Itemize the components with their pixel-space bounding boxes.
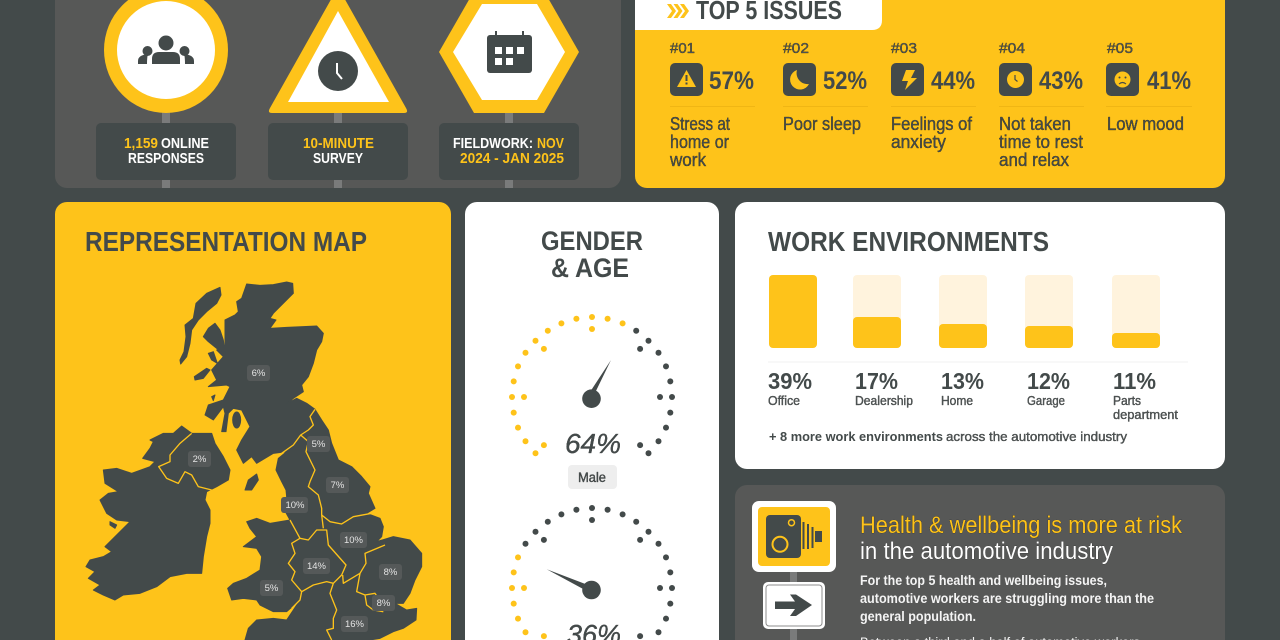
bar values and labels: 13% [941, 368, 984, 394]
map percentage labels: 2% [193, 454, 207, 465]
issue 5: Low mood [1107, 114, 1184, 134]
heading: health and wellbeing [860, 512, 1183, 565]
label: online responses [96, 123, 236, 180]
issue 4: 43% [1039, 67, 1083, 95]
issue 4: and relax [999, 150, 1069, 170]
issue 1: Stress at [670, 114, 730, 134]
footnote: across the automotive industry [946, 429, 1128, 444]
heading: work environments: WORK ENVIRONMENTS [768, 226, 1049, 257]
bar values and labels: Home [941, 393, 973, 408]
icon: hexagon sign with calendar [439, 0, 579, 113]
issue 1: work [669, 150, 707, 170]
issue 4: Not taken [999, 114, 1071, 134]
label: survey length: SURVEY [313, 150, 363, 167]
issue 2: 52% [823, 67, 867, 95]
icon: circular sign with people [104, 0, 228, 113]
gauge: female 36% [509, 505, 675, 640]
bar values and labels: Garage [1027, 393, 1065, 408]
issue 1: 57% [709, 67, 754, 95]
body text: For the top 5 health and wellbeing issues, [860, 573, 1107, 588]
issue 3: 44% [931, 67, 975, 95]
panel: survey facts [55, 0, 621, 188]
map percentage labels: 16% [345, 619, 365, 630]
map percentage labels: 8% [377, 598, 391, 609]
bar chart [768, 275, 1188, 362]
label: fieldwork dates: FIELDWORK: [453, 135, 533, 152]
map percentage labels: 14% [307, 561, 327, 572]
label: fieldwork dates: NOV [537, 135, 564, 152]
issue 5: 41% [1147, 67, 1191, 95]
bar values and labels: department [1113, 407, 1178, 422]
bar values and labels: 12% [1027, 368, 1070, 394]
issue 2 [783, 40, 868, 134]
bar values and labels: Parts [1113, 393, 1141, 408]
gauge: male 64%: 64% [565, 428, 621, 459]
icon: triangular sign with clock [269, 0, 407, 113]
issue 3 [891, 40, 976, 152]
heading: representation map: REPRESENTATION MAP [85, 226, 367, 257]
panel: health and wellbeing risk [735, 485, 1225, 640]
body text: automotive workers are struggling more than the [860, 591, 1154, 606]
heading: health and wellbeing: in the automotive industry [860, 538, 1113, 565]
label: online responses: RESPONSES [128, 150, 204, 167]
label: online responses: ONLINE [161, 135, 209, 152]
bar values and labels: 11% [1113, 368, 1156, 394]
map percentage labels: 8% [384, 567, 398, 578]
map percentage labels: 6% [252, 368, 266, 379]
bar values and labels: 39% [768, 368, 812, 394]
label: survey length: 10-MINUTE [303, 135, 374, 152]
issue 4: #04 [999, 40, 1025, 57]
map percentage labels: 7% [331, 480, 345, 491]
label: fieldwork dates [439, 123, 579, 180]
panel: gender and age [465, 202, 719, 640]
issue 4 [999, 40, 1084, 170]
map of UK and Ireland [86, 282, 422, 640]
label: fieldwork dates: 2024 - JAN 2025 [460, 150, 564, 167]
panel: representation map [55, 202, 451, 640]
map percentage labels: 5% [265, 583, 279, 594]
heading: gender and age: & AGE [551, 253, 629, 283]
bar values and labels: Dealership [855, 393, 913, 408]
issue 5 [1106, 40, 1192, 134]
issue 1: #01 [670, 40, 695, 57]
issue 1: home or [670, 132, 729, 152]
panel: top 5 issues [635, 0, 1225, 188]
label: survey length [268, 123, 408, 180]
heading: gender and age: GENDER [541, 226, 643, 256]
issue 2: #02 [783, 40, 809, 57]
issue 4: time to rest [999, 132, 1083, 152]
icon: speed camera sign [752, 501, 836, 572]
body text: general population. [860, 609, 976, 624]
heading: top 5 issues tab [635, 0, 882, 30]
bar values and labels [768, 368, 1178, 422]
map percentage labels: 5% [312, 439, 326, 450]
panel: work environments [735, 202, 1225, 469]
bar values and labels: Office [768, 393, 800, 408]
footnote [769, 429, 1128, 444]
heading: health and wellbeing: Health & wellbeing is more at risk [860, 512, 1183, 539]
issue 5: #05 [1107, 40, 1133, 57]
issue 2: Poor sleep [783, 114, 861, 134]
map percentage labels: 10% [344, 535, 364, 546]
map percentage labels [188, 365, 402, 632]
issue 3: #03 [891, 40, 917, 57]
issue 1 [669, 40, 755, 170]
label: online responses: 1,159 [124, 135, 158, 152]
body text [860, 573, 1154, 640]
issue 3: anxiety [891, 132, 946, 152]
icon: arrow sign [763, 582, 825, 629]
gauge: male 64%: Male [578, 470, 606, 485]
bar values and labels: 17% [855, 368, 898, 394]
heading: gender and age [541, 226, 643, 283]
footnote: + 8 more work environments [769, 429, 943, 444]
gauge: male 64% [509, 314, 675, 489]
issue 3: Feelings of [891, 114, 973, 134]
map percentage labels: 10% [285, 500, 305, 511]
